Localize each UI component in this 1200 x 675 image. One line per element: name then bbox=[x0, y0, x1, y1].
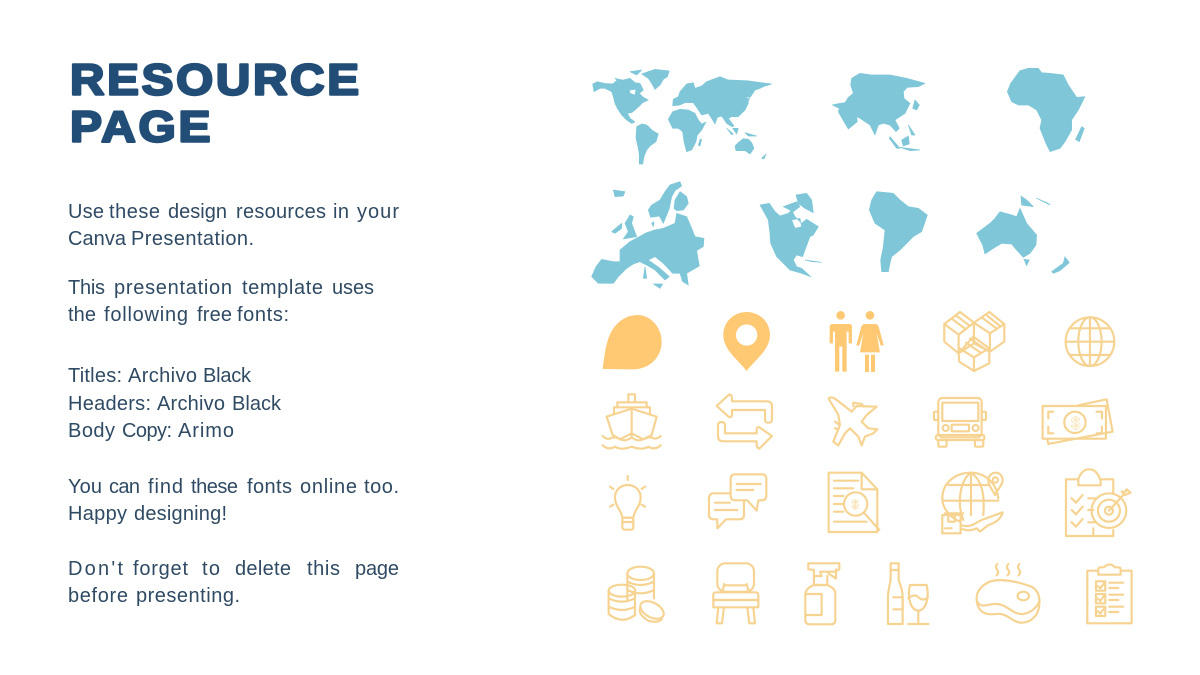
text block: font list: Black bbox=[203, 365, 252, 387]
icon: financial document: $ bbox=[852, 498, 859, 512]
text block: template fonts note: This bbox=[68, 277, 105, 299]
text block: delete reminder: delete bbox=[235, 558, 291, 580]
text block: closing note: designing! bbox=[134, 503, 227, 525]
text block: closing note: online bbox=[300, 476, 357, 498]
text block: closing note: these bbox=[191, 476, 238, 498]
text block: template fonts note: presentation bbox=[114, 277, 232, 299]
text block: delete reminder: forget bbox=[133, 558, 188, 580]
text block: closing note: can bbox=[109, 476, 140, 498]
icon: truck bbox=[934, 398, 986, 447]
icon: clipboard with target bbox=[1066, 469, 1131, 536]
text block: template fonts note bbox=[68, 277, 374, 326]
text block: intro: these bbox=[109, 201, 160, 223]
map: Oceania bbox=[977, 196, 1069, 273]
icon: financial document bbox=[829, 473, 879, 532]
text block: font list: Arimo bbox=[178, 420, 234, 442]
icon: ship bbox=[603, 394, 661, 449]
icon: bottle and wine glass bbox=[888, 563, 928, 624]
icon: spray bottle bbox=[805, 563, 839, 624]
text block: font list: Titles: bbox=[68, 365, 122, 387]
text block: closing note: find bbox=[148, 476, 183, 498]
map: Africa bbox=[1007, 68, 1085, 152]
text block: closing note bbox=[68, 476, 399, 525]
text block: template fonts note: uses bbox=[332, 277, 374, 299]
title: RESOURCE bbox=[70, 54, 362, 104]
map: North America bbox=[760, 193, 822, 277]
icon: banknotes bbox=[1043, 399, 1113, 444]
text block: template fonts note: following bbox=[104, 304, 188, 326]
text block: intro: in bbox=[333, 201, 349, 223]
text block: font list bbox=[68, 365, 282, 442]
text block: closing note: You bbox=[68, 476, 102, 498]
text block: delete reminder: presenting. bbox=[136, 585, 240, 607]
icon: lightbulb bbox=[610, 476, 645, 530]
icon: man and woman bbox=[830, 311, 884, 372]
text block: font list: Black bbox=[232, 393, 282, 415]
text block: intro: your bbox=[357, 201, 399, 223]
text block: font list: Body bbox=[68, 420, 115, 442]
text block: font list: Copy: bbox=[122, 420, 172, 442]
text block: template fonts note: free bbox=[197, 304, 232, 326]
icon: map pin bbox=[723, 312, 770, 371]
title bbox=[70, 54, 362, 151]
icon: airplane bbox=[829, 397, 877, 445]
map: Asia bbox=[832, 73, 925, 151]
text block: template fonts note: the bbox=[68, 304, 96, 326]
icon: steak bbox=[977, 564, 1039, 623]
panel: icons rows three and four bbox=[609, 469, 1132, 624]
panel: maps bbox=[592, 68, 1085, 288]
text block: delete reminder: before bbox=[68, 585, 128, 607]
text block: font list: Archivo bbox=[157, 393, 225, 415]
icon: speech blob bbox=[603, 315, 662, 369]
icon: checklist clipboard bbox=[1087, 564, 1132, 623]
text block: intro bbox=[68, 201, 399, 250]
text block: intro: Presentation. bbox=[131, 228, 254, 250]
icon: cardboard boxes bbox=[944, 312, 1004, 371]
text block: delete reminder: page bbox=[355, 558, 399, 580]
icon: globe with pin and parcel bbox=[942, 473, 1003, 533]
text block: closing note: Happy bbox=[68, 503, 127, 525]
text block: font list: Headers: bbox=[68, 393, 151, 415]
text block: delete reminder: this bbox=[307, 558, 340, 580]
panel: icons rows one and two bbox=[603, 311, 1114, 449]
text block: intro: Use bbox=[68, 201, 104, 223]
text block: font list: Archivo bbox=[128, 365, 197, 387]
text block: delete reminder: Don't bbox=[68, 558, 123, 580]
icon: exchange arrows bbox=[717, 394, 772, 449]
text block: delete reminder: to bbox=[202, 558, 220, 580]
text block: template fonts note: template bbox=[242, 277, 323, 299]
icon: globe bbox=[1066, 317, 1114, 366]
text block: closing note: too. bbox=[364, 476, 399, 498]
map: Europe bbox=[592, 182, 704, 288]
title: PAGE bbox=[70, 101, 213, 151]
map: world bbox=[593, 69, 772, 164]
text block: intro: resources bbox=[236, 201, 326, 223]
text block: delete reminder bbox=[68, 558, 399, 607]
icon: banknotes: $ bbox=[1071, 413, 1081, 432]
map: South America bbox=[869, 192, 927, 272]
text block: intro: design bbox=[168, 201, 227, 223]
text block: closing note: fonts bbox=[247, 476, 292, 498]
icon: coin stacks bbox=[609, 567, 667, 622]
text block: intro: Canva bbox=[68, 228, 127, 250]
icon: chair bbox=[713, 563, 758, 623]
icon: speech bubbles bbox=[709, 474, 766, 528]
text block: template fonts note: fonts: bbox=[237, 304, 289, 326]
